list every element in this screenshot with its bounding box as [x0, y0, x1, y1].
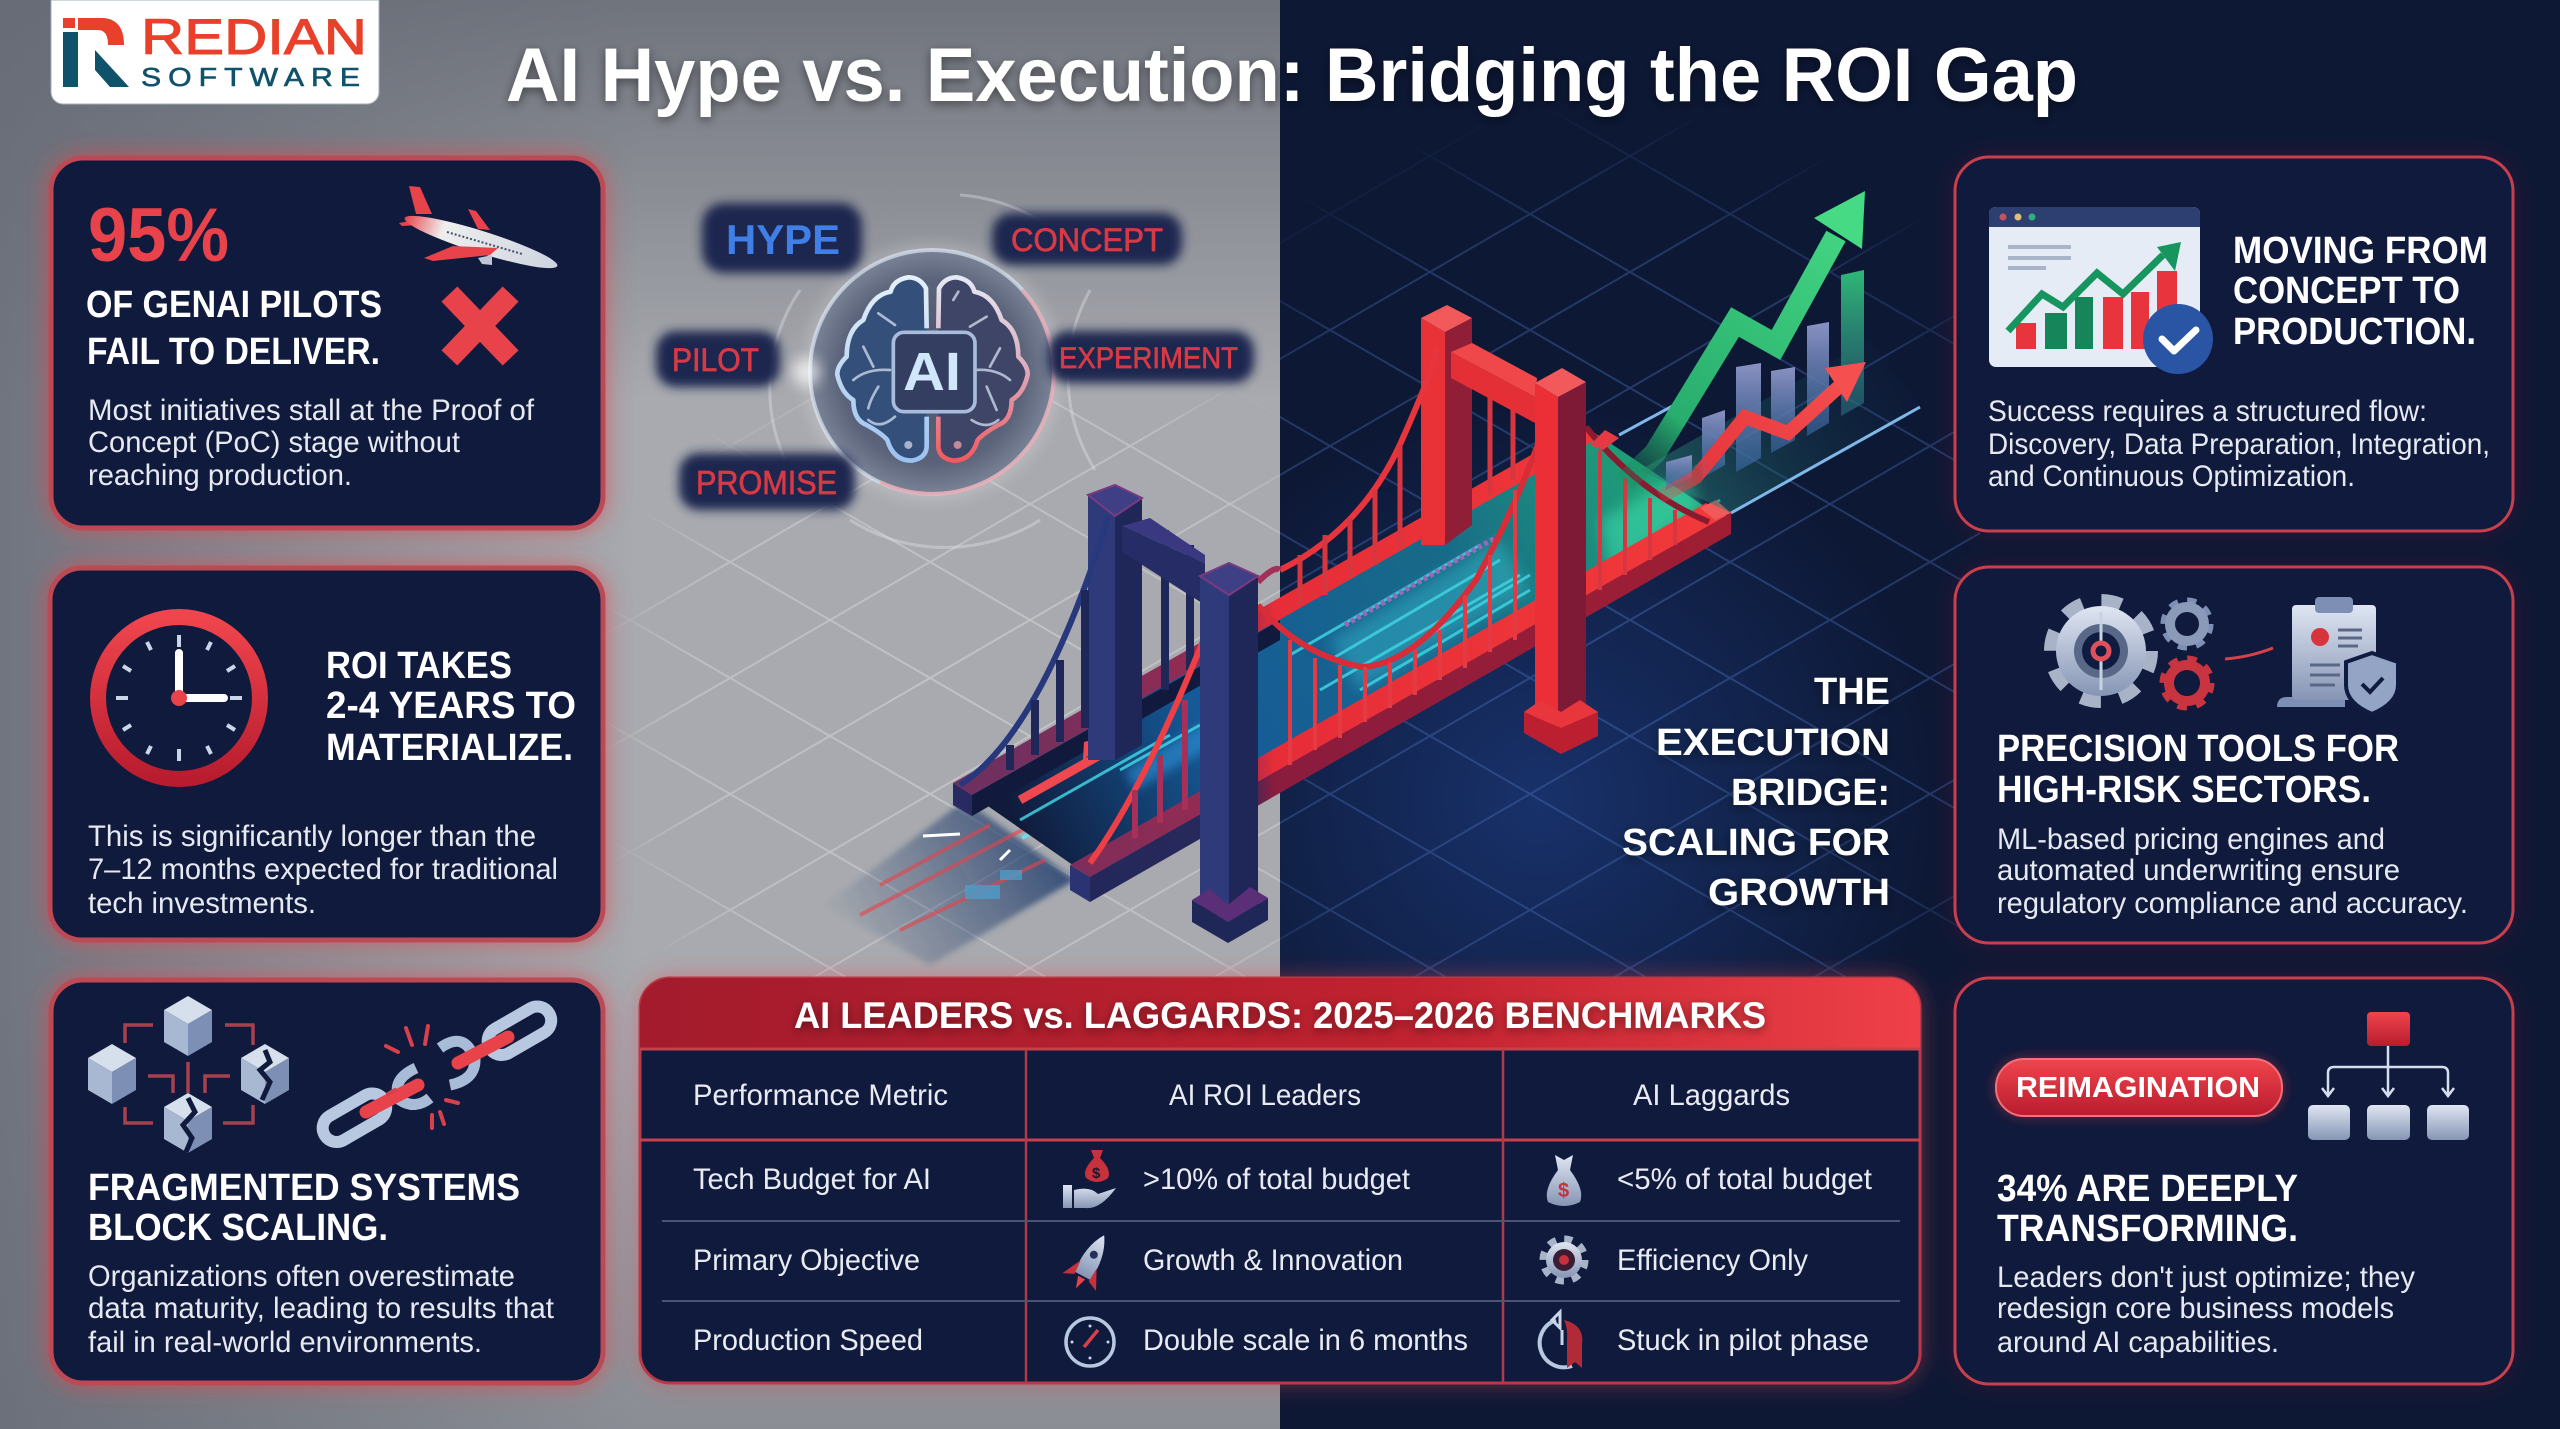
row: production speed: Stuck in pilot phase	[1617, 1324, 1869, 1357]
heading: MATERIALIZE.	[326, 727, 573, 769]
near red tower	[1451, 343, 1598, 754]
far cables and suspenders	[960, 347, 1513, 785]
body text	[88, 394, 535, 492]
row: tech budget: <5% of total budget	[1617, 1163, 1873, 1196]
row: primary objective: Efficiency Only	[1617, 1244, 1808, 1277]
heading: ROI TAKES	[326, 645, 512, 687]
heading	[2233, 230, 2488, 353]
body text: data maturity, leading to results that	[88, 1292, 555, 1325]
body text: Most initiatives stall at the Proof of	[88, 394, 535, 427]
column headers: AI ROI Leaders	[1169, 1079, 1361, 1112]
heading: FRAGMENTED SYSTEMS	[88, 1167, 520, 1209]
pill: pilot: PILOT	[672, 342, 759, 378]
heading: 2-4 YEARS TO	[326, 685, 576, 727]
illustration: AI brain and hype labels	[656, 195, 1254, 547]
body text: reaching production.	[88, 459, 352, 492]
icon: stalled clock ribbon	[1540, 1312, 1582, 1368]
icon: money in hand	[1063, 1150, 1116, 1208]
body text: Concept (PoC) stage without	[88, 426, 461, 459]
icon: clipboard with shield	[2277, 597, 2398, 714]
body text	[88, 820, 558, 920]
body text	[1988, 395, 2490, 493]
body text: around AI capabilities.	[1997, 1326, 2279, 1359]
pill: promise: PROMISE	[696, 464, 837, 501]
icon: dashboard window	[1989, 207, 2213, 374]
far bridge rail and road	[953, 425, 1725, 877]
heading: 34% ARE DEEPLY	[1997, 1168, 2298, 1210]
AI label: AI	[903, 342, 961, 402]
column headers: Performance Metric	[693, 1079, 948, 1112]
row: production speed	[693, 1312, 1869, 1368]
pill: experiment	[1048, 331, 1254, 383]
panel: 95% fail	[49, 156, 605, 530]
logo wordmark: REDIAN	[141, 9, 367, 65]
icon: fragmented cubes	[88, 996, 289, 1153]
icon: gears	[2051, 601, 2273, 707]
near deck rail	[1070, 500, 1731, 902]
heading: TRANSFORMING.	[1997, 1208, 2298, 1250]
icon: brain	[837, 277, 1028, 461]
heading: MOVING FROM	[2233, 230, 2488, 272]
body text: 7–12 months expected for traditional	[88, 853, 558, 886]
body text: and Continuous Optimization.	[1988, 460, 2355, 493]
column headers	[693, 1079, 1790, 1112]
body text: ML-based pricing engines and	[1997, 823, 2385, 856]
panel: concept to production	[1955, 157, 2513, 531]
text: execution bridge: BRIDGE:	[1731, 772, 1890, 814]
icon: broken chain	[318, 1001, 556, 1147]
heading: FAIL TO DELIVER.	[87, 331, 380, 373]
icon: logo mark	[63, 18, 129, 87]
body text: automated underwriting ensure	[1997, 854, 2400, 887]
pill: concept: CONCEPT	[1011, 222, 1163, 258]
illustration: execution bridge	[825, 191, 1920, 965]
pill: promise	[679, 453, 855, 510]
background: hype side	[0, 0, 1280, 1429]
text: execution bridge: SCALING FOR	[1622, 822, 1890, 864]
pill: pilot	[656, 331, 780, 387]
heading	[1997, 1168, 2298, 1250]
pill: hype: HYPE	[726, 216, 840, 263]
heading: HIGH-RISK SECTORS.	[1997, 769, 2371, 811]
arrow: green growth line	[1625, 191, 1865, 482]
column headers: AI Laggards	[1633, 1079, 1790, 1112]
row: tech budget: Tech Budget for AI	[693, 1163, 931, 1196]
text: execution bridge	[1622, 671, 1890, 914]
text: execution bridge: EXECUTION	[1656, 722, 1890, 764]
panel: reimagination	[1955, 978, 2513, 1384]
heading: PRECISION TOOLS FOR	[1997, 728, 2399, 770]
row: production speed: Production Speed	[693, 1324, 923, 1357]
heading	[88, 1167, 520, 1249]
row: tech budget: >10% of total budget	[1143, 1163, 1411, 1196]
icon: money bag: $	[1558, 1180, 1569, 1202]
heading	[326, 645, 576, 769]
panel: precision tools	[1955, 567, 2513, 943]
icon: money in hand: $	[1092, 1165, 1101, 1182]
heading	[1997, 728, 2399, 811]
heading: BLOCK SCALING.	[88, 1207, 388, 1249]
logo subtext: SOFTWARE	[141, 62, 367, 92]
AI brain disc	[792, 242, 1062, 502]
logo	[51, 0, 379, 104]
panel: fragmented systems	[49, 978, 605, 1385]
near left tower	[1122, 518, 1268, 943]
icon: org chart	[2308, 1012, 2469, 1140]
icon: airplane	[399, 186, 561, 276]
icon: money bag	[1547, 1155, 1581, 1206]
icon: rocket	[1059, 1226, 1121, 1297]
body text: regulatory compliance and accuracy.	[1997, 887, 2468, 920]
text: execution bridge: THE	[1814, 671, 1890, 713]
body text: fail in real-world environments.	[88, 1326, 482, 1359]
text: execution bridge: GROWTH	[1708, 872, 1890, 914]
row: production speed: Double scale in 6 months	[1143, 1324, 1468, 1357]
body text: Organizations often overestimate	[88, 1260, 515, 1293]
badge	[1996, 1059, 2282, 1116]
icon: red X	[457, 302, 503, 350]
pill: hype	[702, 203, 862, 273]
title: AI Hype vs. Execution: Bridging the ROI Gap	[506, 33, 2078, 118]
pill: experiment: EXPERIMENT	[1059, 342, 1238, 375]
heading	[86, 284, 382, 373]
near cables and suspenders	[1090, 413, 1709, 863]
badge: REIMAGINATION	[2016, 1072, 2260, 1104]
panel: ROI timeline	[48, 566, 605, 942]
table header band: AI LEADERS vs. LAGGARDS: 2025–2026 BENCHMARKS	[794, 995, 1766, 1036]
row: primary objective: Primary Objective	[693, 1244, 920, 1277]
far towers	[1088, 305, 1472, 760]
icon: gauge	[1066, 1318, 1114, 1366]
stat: 95%	[88, 193, 229, 278]
row: primary objective: Growth & Innovation	[1143, 1244, 1403, 1277]
heading: OF GENAI PILOTS	[86, 284, 382, 326]
body text	[88, 1260, 555, 1359]
icon: clock	[98, 617, 260, 779]
row: primary objective	[693, 1226, 1808, 1297]
benchmark table	[640, 978, 1920, 1383]
body text: This is significantly longer than the	[88, 820, 536, 853]
background: execution side	[1280, 140, 1980, 976]
arrow: red growth line	[1660, 362, 1866, 497]
body text	[1997, 823, 2468, 920]
body text: Success requires a structured flow:	[1988, 395, 2427, 428]
body text	[1997, 1261, 2415, 1359]
icon: gear	[1543, 1239, 1585, 1281]
heading: CONCEPT TO	[2233, 270, 2460, 312]
body text: Discovery, Data Preparation, Integration,	[1988, 428, 2490, 461]
body text: Leaders don't just optimize; they	[1997, 1261, 2415, 1294]
body text: tech investments.	[88, 887, 316, 920]
pill: concept	[992, 213, 1182, 265]
heading: PRODUCTION.	[2233, 311, 2476, 353]
table header band	[640, 978, 1920, 1049]
data trail	[825, 765, 1160, 965]
body text: redesign core business models	[1997, 1292, 2394, 1325]
growth chart	[1619, 191, 1920, 513]
row: tech budget	[693, 1150, 1873, 1208]
